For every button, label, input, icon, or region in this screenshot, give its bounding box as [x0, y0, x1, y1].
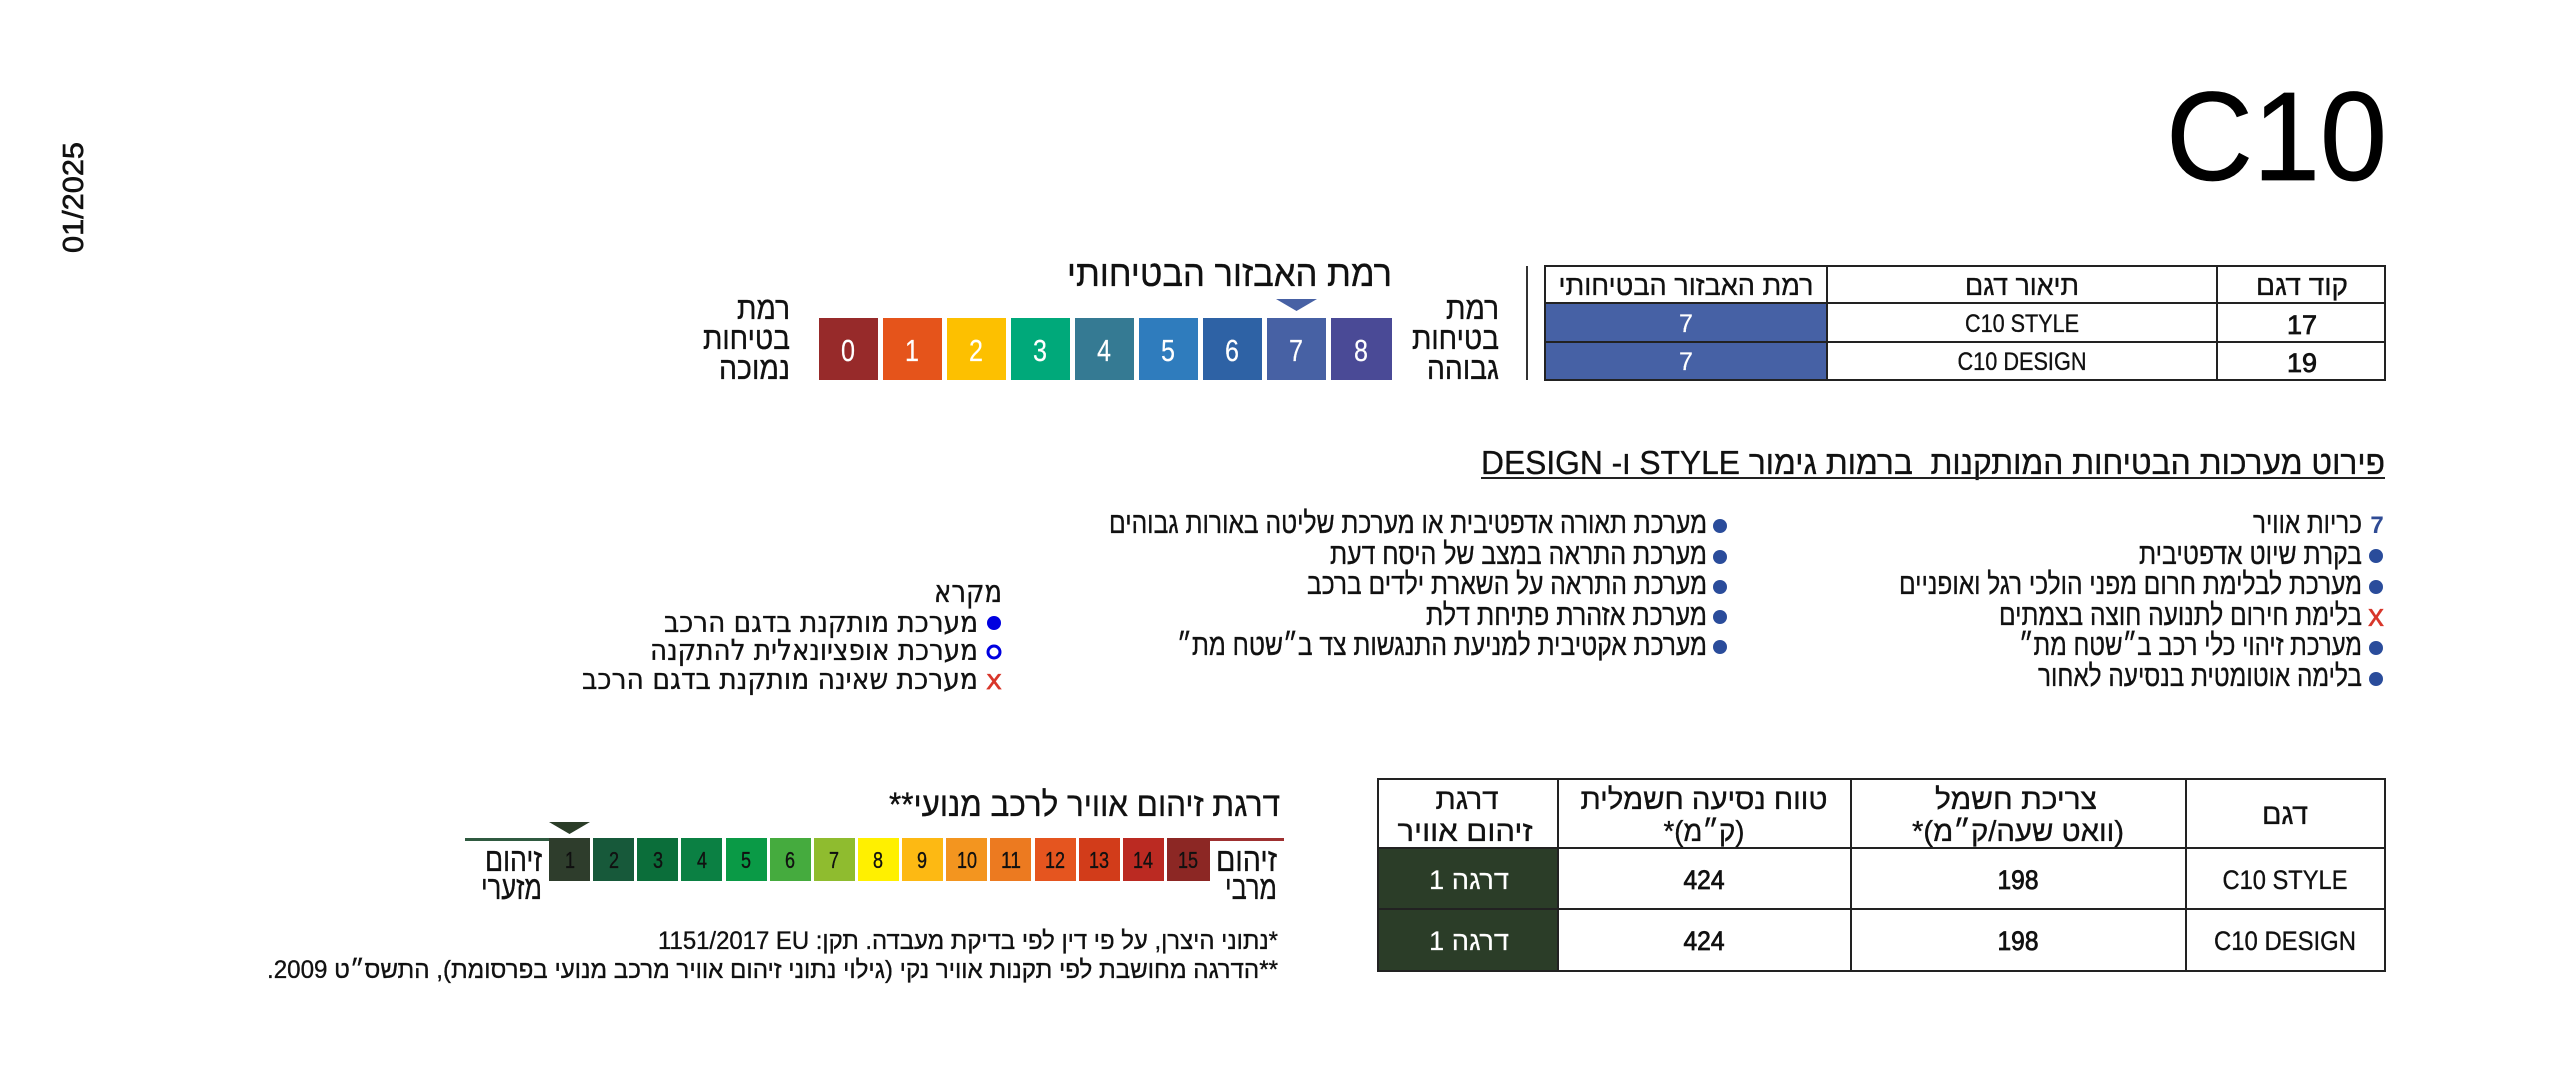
high safety label: רמת [1446, 290, 1499, 326]
safety list column 2: מערכת אזהרת פתיחת דלת [1426, 599, 1707, 632]
footnotes: **הדרגה מחושבת לפי תקנות אוויר נקי (גילוי נתוני זיהום אוויר מרכב מנועי בפרסומת), התשס״ט 2009. [267, 956, 1278, 984]
safety equipment table: 7 [1679, 310, 1693, 338]
pollution cells: 2 [609, 847, 619, 873]
safety systems heading: פירוט מערכות הבטיחות המותקנות ברמות גימור STYLE ו- DESIGN [1481, 444, 2385, 481]
consumption table: דגם [2262, 799, 2308, 831]
model title: C10 [2166, 66, 2387, 207]
safety list column 1: בקרת שיוט אדפטיבית [2139, 538, 2362, 571]
consumption table: C10 STYLE [2222, 865, 2348, 895]
low safety label: נמוכה [719, 350, 790, 386]
safety equipment table: קוד דגם [2256, 270, 2348, 301]
pollution cells: 7 [829, 847, 839, 873]
safety equipment table: C10 DESIGN [1958, 348, 2086, 376]
consumption table: 424 [1684, 926, 1724, 956]
safety list column 1: x [2368, 597, 2384, 633]
level cells: 0 [841, 333, 855, 368]
consumption table: (ק״מ)* [1664, 816, 1744, 848]
safety list column 2: מערכת התראה במצב של היסח דעת [1330, 538, 1707, 571]
level cells: 1 [905, 333, 919, 368]
footnotes [267, 927, 1278, 984]
safety equipment table: 19 [2287, 348, 2317, 378]
safety equipment table: 7 [1679, 348, 1693, 376]
high safety label [1412, 290, 1499, 386]
legend: optional: מערכת אופציונאלית להתקנה [650, 633, 978, 667]
safety list column 1: בלימת חירום לתנועה חוצה בצמתים [1999, 599, 2362, 632]
consumption table: דרגה 1 [1429, 865, 1509, 895]
legend title: מקרא [934, 574, 1002, 610]
low safety label [703, 290, 790, 386]
safety list column 1: כריות אוויר [2253, 507, 2362, 540]
highest pollution label [1216, 841, 1277, 906]
level cells [819, 318, 1392, 380]
consumption table: 424 [1684, 865, 1724, 895]
safety equipment table: רמת האבזור הבטיחותי [1558, 270, 1814, 301]
safety equipment table: C10 STYLE [1965, 310, 2079, 338]
safety equipment table: תיאור דגם [1965, 270, 2079, 301]
consumption table [1378, 779, 2385, 971]
pollution cells: 11 [1001, 847, 1021, 873]
legend [582, 574, 1002, 696]
scale title: רמת האבזור הבטיחותי [1067, 253, 1392, 294]
consumption table: זיהום אוויר [1398, 816, 1532, 848]
safety list column 2: מערכת התראה על השארת ילדים ברכב [1307, 568, 1707, 601]
safety equipment table: 17 [2287, 310, 2317, 340]
level cells: 2 [969, 333, 983, 368]
pollution title: דרגת זיהום אוויר לרכב מנועי** [889, 786, 1280, 824]
safety list column 1: 7 [2370, 512, 2384, 539]
consumption table: C10 DESIGN [2214, 926, 2356, 956]
lowest pollution label [481, 841, 542, 906]
consumption table: צריכת חשמל [1935, 784, 2097, 816]
safety list column 2 [1109, 507, 1727, 662]
consumption table: דרגה 1 [1429, 926, 1509, 956]
consumption table: (וואט שעה/ק״מ)* [1912, 816, 2124, 848]
pollution cells: 5 [741, 847, 751, 873]
safety level scale [703, 253, 1499, 386]
pollution cells: 6 [785, 847, 795, 873]
consumption table: טווח נסיעה חשמלית [1580, 784, 1828, 816]
pollution cells: 10 [957, 847, 977, 873]
pollution scale [465, 786, 1284, 906]
footnotes: *נתוני היצרן, על פי דין לפי בדיקת מעבדה. תקן: EU ‏1151/2017 [658, 927, 1278, 955]
pollution cells: 9 [917, 847, 927, 873]
safety list column 1: מערכת זיהוי כלי רכב ב״שטח מת״ [2019, 629, 2362, 662]
pollution cells: 1 [565, 847, 575, 873]
pollution cells: 13 [1089, 847, 1109, 873]
pollution cells: 3 [653, 847, 663, 873]
safety list column 1: בלימה אוטומטית בנסיעה לאחור [2038, 660, 2362, 693]
lowest pollution label: מזערי [481, 869, 542, 906]
level cells: 3 [1033, 333, 1047, 368]
consumption table: דרגת [1436, 784, 1498, 816]
safety list column 2: מערכת תאורה אדפטיבית או מערכת שליטה באורות גבוהים [1109, 507, 1707, 540]
highest pollution label: זיהום [1216, 841, 1277, 878]
safety equipment table [1545, 266, 2385, 380]
scale end lines [465, 838, 1284, 841]
legend: not installed: מערכת שאינה מותקנת בדגם הרכב [582, 662, 978, 696]
consumption table: 198 [1998, 926, 2038, 956]
high safety label: בטיחות [1412, 320, 1499, 356]
level cells: 7 [1289, 333, 1303, 368]
pollution cells: 8 [873, 847, 883, 873]
highest pollution label: מרבי [1225, 869, 1277, 906]
pollution cells: 15 [1178, 847, 1198, 873]
pollution cells: 4 [697, 847, 707, 873]
low safety label: רמת [737, 290, 790, 326]
lowest pollution label: זיהום [485, 841, 542, 878]
safety list column 1 [1899, 507, 2384, 693]
level cells: 8 [1354, 333, 1368, 368]
pollution marker [549, 822, 590, 834]
pollution cells [549, 838, 1210, 881]
level cells: 5 [1161, 333, 1175, 368]
date: 01/2025 [58, 142, 90, 253]
pollution cells: 14 [1133, 847, 1153, 873]
low safety label: בטיחות [703, 320, 790, 356]
legend: not installed: x [986, 663, 1002, 696]
level marker [1276, 299, 1317, 311]
safety list column 2: מערכת אקטיבית למניעת התנגשות צד ב״שטח מת״ [1177, 629, 1707, 662]
high safety label: גבוהה [1427, 350, 1499, 386]
safety list column 1: מערכת לבלימת חרום מפני הולכי רגל ואופניים [1899, 568, 2362, 601]
legend: installed: מערכת מותקנת בדגם הרכב [664, 605, 978, 639]
level cells: 6 [1225, 333, 1239, 368]
consumption table: 198 [1998, 865, 2038, 895]
level cells: 4 [1097, 333, 1111, 368]
pollution cells: 12 [1045, 847, 1065, 873]
